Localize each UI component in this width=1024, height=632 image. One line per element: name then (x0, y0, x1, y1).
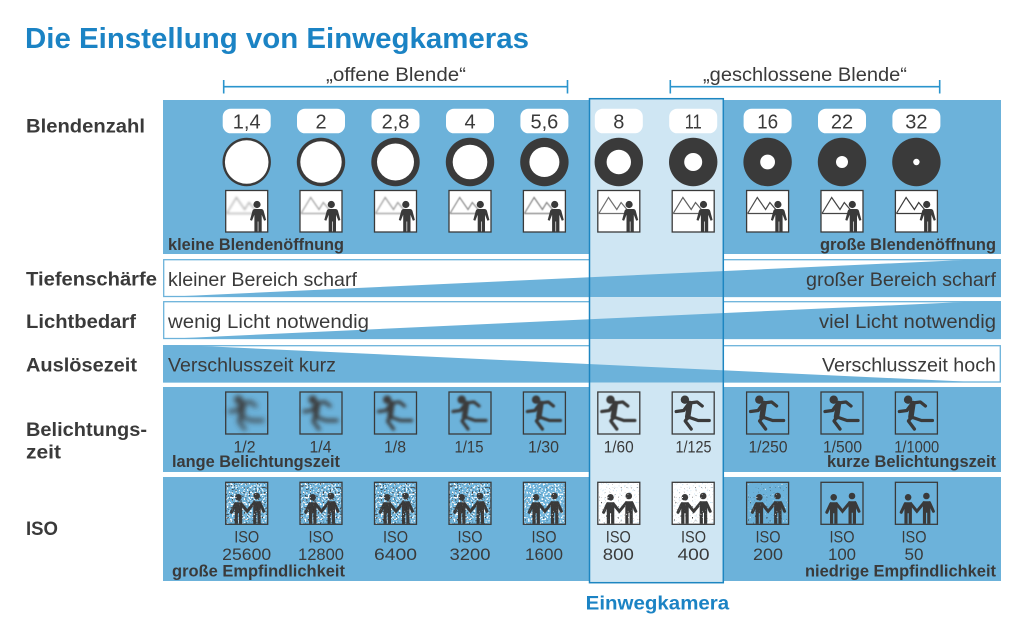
aperture captions: große Blendenöffnung (820, 236, 996, 254)
f-number pills: 4 (464, 111, 476, 133)
ISO values: 50 (904, 545, 924, 564)
ISO values: ISO (308, 528, 334, 547)
shutter captions (172, 453, 996, 471)
ISO values: 3200 (450, 545, 490, 564)
row labels: Belichtungs- (26, 420, 147, 441)
shutter values: 1/1000 (894, 438, 939, 457)
shutter captions: lange Belichtungszeit (172, 453, 340, 471)
bar captions: viel Licht notwendig (819, 311, 996, 333)
panel: Belichtungszeit background (163, 387, 1001, 472)
wedge: Lichtbedarf (163, 301, 1001, 339)
ISO values: ISO (532, 528, 556, 547)
ISO values: 6400 (374, 545, 417, 564)
ISO captions: große Empfindlichkeit (172, 563, 345, 581)
bracket: geschlossene Blende (670, 65, 940, 94)
bracket: geschlossene Blende: „geschlossene Blende“ (703, 65, 907, 86)
shutter values: 1/15 (454, 438, 484, 457)
shutter values: 1/4 (310, 438, 332, 457)
ISO values (222, 528, 926, 564)
ISO noise icons (226, 482, 937, 524)
title: Die Einstellung von Einwegkameras (25, 23, 529, 55)
aperture captions: kleine Blendenöffnung (168, 236, 344, 254)
ISO values: 800 (603, 545, 634, 564)
ISO values: ISO (830, 528, 854, 547)
ISO values: 1600 (525, 545, 563, 564)
row labels: Tiefenschärfe (26, 270, 157, 290)
ISO values: ISO (681, 528, 706, 547)
shutter running icons (226, 392, 937, 434)
panel: Tiefenschärfe bar (164, 260, 1000, 296)
bar captions: kleiner Bereich scharf (168, 269, 358, 291)
bar captions (167, 269, 997, 376)
shutter values: 1/500 (823, 438, 862, 457)
panel: Blendenzahl background (163, 100, 1001, 254)
shutter values: 1/125 (676, 438, 712, 457)
ISO values: ISO (902, 528, 926, 547)
ISO values: 100 (828, 545, 856, 564)
ISO values: ISO (756, 528, 780, 547)
row labels: ISO (26, 519, 58, 540)
shutter values: 1/2 (234, 438, 256, 457)
depth-of-field icons (226, 190, 937, 232)
ISO captions (172, 563, 996, 581)
shutter values: 1/60 (604, 438, 634, 457)
shutter values: 1/8 (384, 438, 406, 457)
f-number pills: 32 (905, 111, 928, 133)
shutter values (234, 438, 939, 457)
highlight: Einwegkamera column border (590, 99, 723, 583)
wedge: Tiefenschärfe (163, 259, 1001, 297)
highlight caption: Einwegkamera: Einwegkamera (586, 592, 729, 614)
f-number pills: 11 (685, 111, 702, 133)
bar captions: wenig Licht notwendig (167, 311, 369, 333)
shutter values: 1/250 (748, 438, 788, 457)
ISO values: ISO (383, 528, 408, 547)
shutter values: 1/30 (528, 438, 559, 457)
bar captions: Verschlusszeit kurz (168, 354, 336, 376)
row labels: Auslösezeit (26, 356, 138, 376)
panel: Auslösezeit bar (164, 346, 1000, 382)
bracket: offene Blende: „offene Blende“ (326, 65, 466, 86)
highlight: Einwegkamera column fill (590, 99, 723, 583)
f-number pills: 22 (831, 111, 853, 133)
ISO captions: niedrige Empfindlichkeit (805, 563, 996, 581)
f-number pills: 8 (613, 111, 624, 133)
ISO values: ISO (234, 528, 259, 547)
ISO values: 200 (753, 545, 783, 564)
row labels: Blendenzahl (26, 116, 145, 138)
ISO values: 25600 (222, 545, 271, 564)
row labels (26, 116, 157, 540)
panel: Lichtbedarf bar (164, 302, 1000, 338)
shutter captions: kurze Belichtungszeit (827, 453, 996, 471)
f-number pills: 2,8 (382, 111, 409, 133)
bar captions: großer Bereich scharf (806, 269, 997, 291)
f-number pills: 2 (315, 111, 327, 133)
ISO values: ISO (606, 528, 631, 547)
ISO values: 400 (678, 545, 710, 564)
wedge: Auslösezeit (163, 345, 985, 382)
aperture discs (222, 138, 941, 186)
aperture captions (168, 236, 996, 254)
f-number pills: 5,6 (530, 111, 558, 133)
row labels: Lichtbedarf (26, 312, 137, 333)
ISO values: 12800 (298, 545, 344, 564)
f-number pills (223, 109, 940, 133)
panel: ISO background (163, 477, 1001, 581)
bracket: offene Blende (224, 65, 567, 94)
f-number pills: 1,4 (233, 111, 261, 133)
bar captions: Verschlusszeit hoch (822, 354, 996, 376)
ISO values: ISO (458, 528, 482, 547)
row labels: zeit (26, 442, 62, 464)
f-number pills: 16 (757, 111, 778, 133)
